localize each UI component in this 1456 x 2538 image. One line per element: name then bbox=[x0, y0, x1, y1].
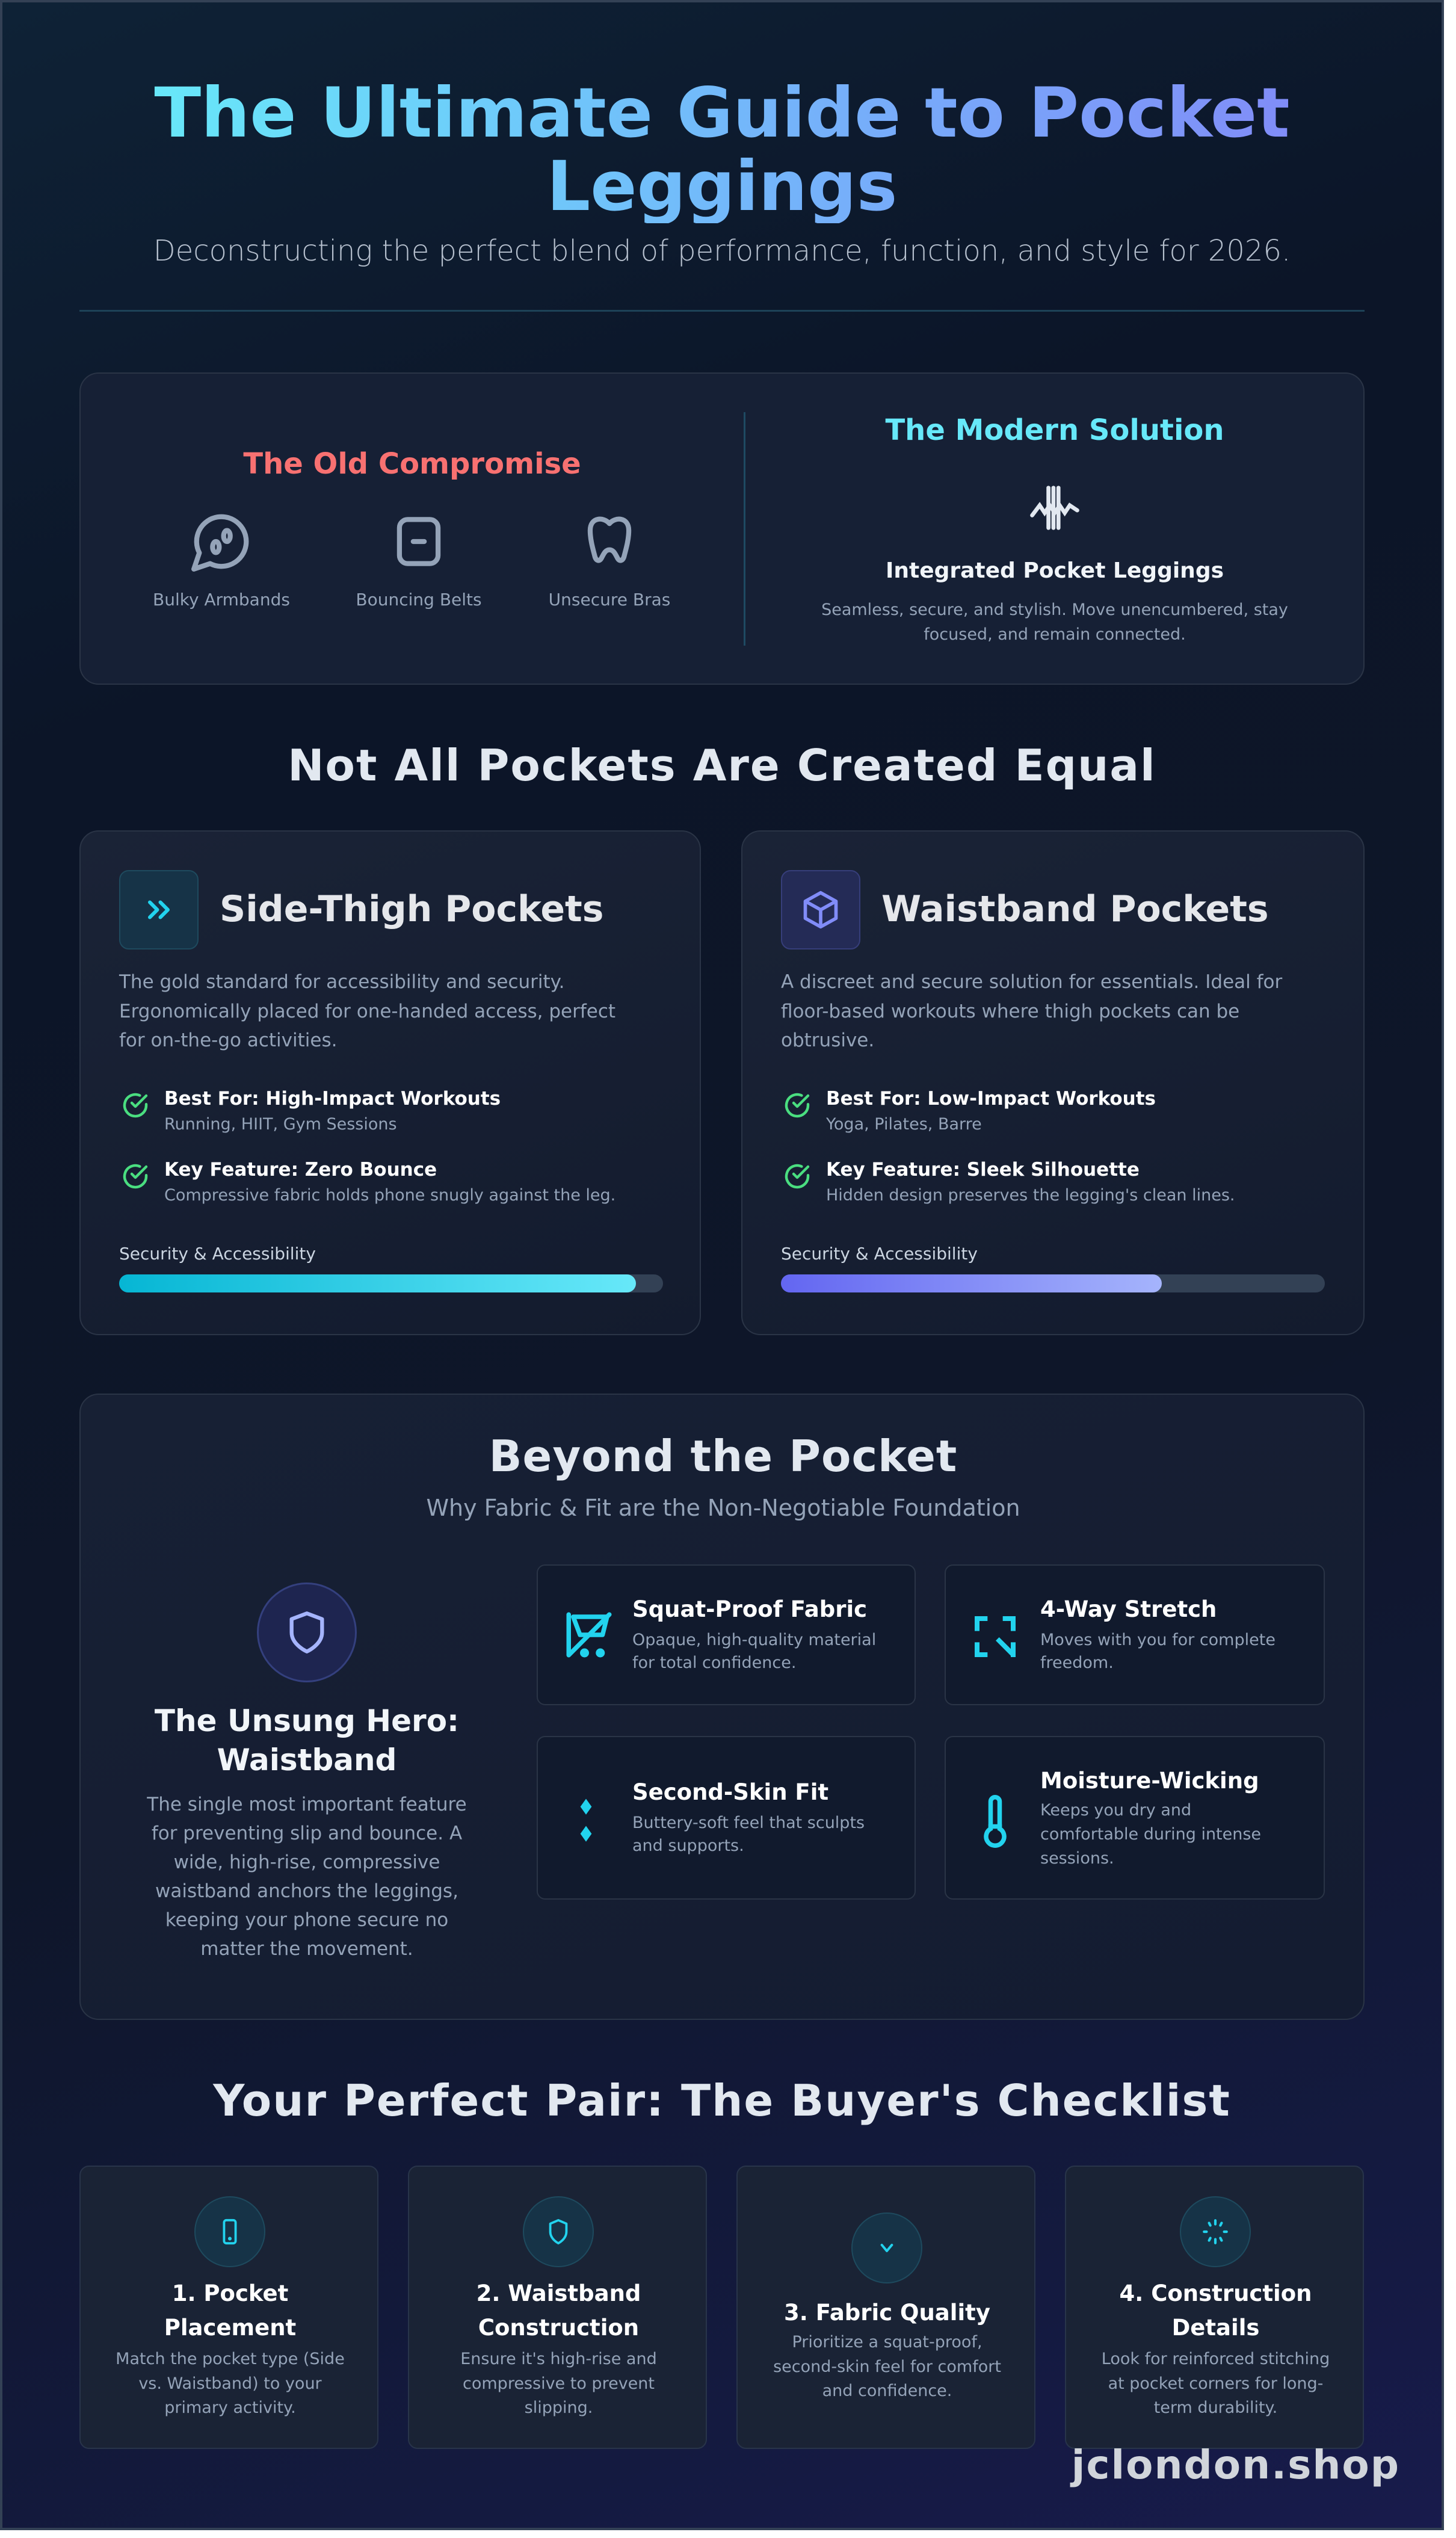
text: hero desc: waistband anchors the leggings, bbox=[155, 1880, 458, 1902]
label: bouncing belts: Bouncing Belts bbox=[356, 590, 482, 610]
panel: old vs modern bbox=[79, 372, 1365, 685]
panel: beyond the pocket bbox=[79, 1394, 1365, 2020]
label: unsecure bras: Unsecure Bras bbox=[549, 590, 670, 610]
label: bulky armbands: Bulky Armbands bbox=[153, 590, 290, 610]
heading: old compromise: The Old Compromise bbox=[243, 447, 581, 481]
card desc: for on-the-go activities. bbox=[119, 1030, 337, 1051]
text: integrated pocket leggings: Integrated Pocket Leggings bbox=[886, 558, 1224, 583]
feature: 4-way stretch: Moves with you for complete bbox=[1040, 1631, 1276, 1649]
checklist card 2 bbox=[408, 2166, 707, 2449]
text: hero desc: wide, high-rise, compressive bbox=[174, 1851, 440, 1873]
checklist card 4: term durability. bbox=[1154, 2398, 1277, 2417]
panel: side-thigh pockets bbox=[79, 830, 701, 1335]
icon: belt bbox=[397, 517, 440, 566]
check item 2 bbox=[123, 1159, 615, 1205]
check item 2 bbox=[785, 1159, 1235, 1205]
brand: jclondon.shop: jclondon.shop bbox=[1072, 2442, 1400, 2488]
card desc: obtrusive. bbox=[781, 1030, 874, 1051]
checklist card 1: vs. Waistband) to your bbox=[138, 2374, 322, 2392]
icon: shield circle bbox=[257, 1582, 357, 1682]
checklist card 1: Match the pocket type (Side bbox=[116, 2350, 345, 2368]
checklist card 1: primary activity. bbox=[164, 2398, 296, 2417]
heading: checklist: Your Perfect Pair: The Buyer's Checklist bbox=[213, 2075, 1231, 2126]
card desc: The gold standard for accessibility and security. bbox=[119, 971, 564, 993]
text: hero desc bbox=[147, 1794, 467, 1960]
checklist card 2: Construction bbox=[478, 2315, 639, 2341]
text: unsung hero: Waistband bbox=[217, 1743, 396, 1777]
checklist card 3: Prioritize a squat-proof, bbox=[792, 2333, 982, 2351]
icon: chevrons bbox=[119, 870, 199, 949]
checklist card 1: 1. Pocket bbox=[172, 2280, 288, 2306]
text: unsung hero bbox=[155, 1703, 459, 1777]
subtitle: Deconstructing the perfect blend of performance, function, and style for 2026. bbox=[153, 234, 1291, 268]
feature: second-skin: and supports. bbox=[632, 1836, 744, 1855]
bar chart bbox=[781, 1274, 1325, 1292]
feature: moisture-wicking: sessions. bbox=[1040, 1849, 1114, 1868]
feature: squat-proof: for total confidence. bbox=[632, 1653, 796, 1672]
title bbox=[144, 76, 1300, 223]
checklist card 4: Details bbox=[1172, 2315, 1259, 2341]
check item 2: Key Feature: Zero Bounce bbox=[164, 1159, 437, 1181]
text: modern desc: focused, and remain connected. bbox=[924, 625, 1186, 644]
bar chart bbox=[119, 1274, 663, 1292]
check item 1: Best For: High-Impact Workouts bbox=[164, 1088, 501, 1110]
feature: moisture-wicking: comfortable during intense bbox=[1040, 1825, 1261, 1844]
check item 1: Running, HIIT, Gym Sessions bbox=[164, 1115, 397, 1134]
bar label: Security & Accessibility bbox=[119, 1244, 316, 1264]
card title: Waistband Pockets bbox=[881, 888, 1269, 930]
feature: 4-way stretch: freedom. bbox=[1040, 1653, 1114, 1672]
feature: squat-proof: Opaque, high-quality material bbox=[632, 1631, 876, 1649]
card desc: Ergonomically placed for one-handed access, perfect bbox=[119, 1000, 615, 1022]
checklist card 4: at pocket corners for long- bbox=[1108, 2374, 1323, 2392]
checklist card 1: Placement bbox=[164, 2315, 296, 2341]
checklist card 3 bbox=[736, 2166, 1035, 2449]
text: modern desc bbox=[821, 601, 1288, 644]
check item 1: Yoga, Pilates, Barre bbox=[826, 1115, 982, 1134]
checklist card 1 bbox=[79, 2166, 378, 2449]
card desc bbox=[781, 971, 1283, 1051]
check item 2: Hidden design preserves the legging's clean lines. bbox=[826, 1186, 1235, 1205]
feature: moisture-wicking: Keeps you dry and bbox=[1040, 1801, 1191, 1820]
check item 2: Key Feature: Sleek Silhouette bbox=[826, 1159, 1140, 1181]
icon: bra bbox=[587, 516, 632, 563]
icon: cube bbox=[781, 870, 860, 949]
checklist card 4: Look for reinforced stitching bbox=[1102, 2350, 1330, 2368]
text: modern desc: Seamless, secure, and stylish. Move unencumbered, stay bbox=[821, 601, 1288, 619]
checklist card 3: 3. Fabric Quality bbox=[784, 2300, 990, 2326]
feature: squat-proof: Squat-Proof Fabric bbox=[632, 1596, 867, 1622]
checklist card 2: 2. Waistband bbox=[477, 2280, 641, 2306]
title: The Ultimate Guide to Pocket bbox=[154, 73, 1290, 153]
check item 1: Best For: Low-Impact Workouts bbox=[826, 1088, 1156, 1110]
card title: Side-Thigh Pockets bbox=[220, 888, 603, 930]
feature: 4-way stretch bbox=[945, 1564, 1325, 1705]
feature: 4-way stretch: 4-Way Stretch bbox=[1040, 1596, 1217, 1622]
feature: moisture-wicking: Moisture-Wicking bbox=[1040, 1768, 1259, 1794]
heading: modern solution: The Modern Solution bbox=[885, 413, 1224, 447]
text: unsung hero: The Unsung Hero: bbox=[155, 1703, 459, 1738]
check item 1 bbox=[123, 1088, 501, 1134]
checklist card 2: Ensure it's high-rise and bbox=[460, 2350, 657, 2368]
checklist card 4 bbox=[1065, 2166, 1364, 2449]
feature: second-skin bbox=[537, 1736, 916, 1900]
text: hero desc: for preventing slip and bounce. A bbox=[152, 1823, 462, 1844]
title: Leggings bbox=[547, 146, 897, 226]
check item 2: Compressive fabric holds phone snugly against the leg. bbox=[164, 1186, 615, 1205]
feature: second-skin: Buttery-soft feel that sculpts bbox=[632, 1814, 865, 1832]
feature: moisture-wicking bbox=[945, 1736, 1325, 1900]
subheading: Why Fabric & Fit are the Non-Negotiable Foundation bbox=[426, 1495, 1020, 1521]
checklist card 3: and confidence. bbox=[822, 2382, 952, 2400]
checklist card 2: compressive to prevent bbox=[463, 2374, 655, 2392]
checklist card 4: 4. Construction bbox=[1120, 2280, 1312, 2306]
text: hero desc: The single most important feature bbox=[147, 1794, 467, 1815]
heading: Beyond the Pocket bbox=[489, 1431, 957, 1481]
icon: armband bbox=[191, 514, 249, 572]
icon: leggings bbox=[1030, 486, 1079, 530]
panel: waistband pockets bbox=[741, 830, 1365, 1335]
card desc: floor-based workouts where thigh pockets can be bbox=[781, 1000, 1239, 1022]
checklist card 3: second-skin feel for comfort bbox=[773, 2357, 1001, 2376]
card desc bbox=[119, 971, 615, 1051]
check item 1 bbox=[785, 1088, 1156, 1134]
bar label: Security & Accessibility bbox=[781, 1244, 978, 1264]
heading: not all pockets: Not All Pockets Are Created Equal bbox=[288, 740, 1156, 791]
feature: squat-proof bbox=[537, 1564, 916, 1705]
text: hero desc: matter the movement. bbox=[200, 1938, 413, 1960]
checklist card 2: slipping. bbox=[525, 2398, 593, 2417]
text: hero desc: keeping your phone secure no bbox=[165, 1909, 448, 1931]
card desc: A discreet and secure solution for essentials. Ideal for bbox=[781, 971, 1282, 993]
feature: second-skin: Second-Skin Fit bbox=[632, 1779, 828, 1805]
